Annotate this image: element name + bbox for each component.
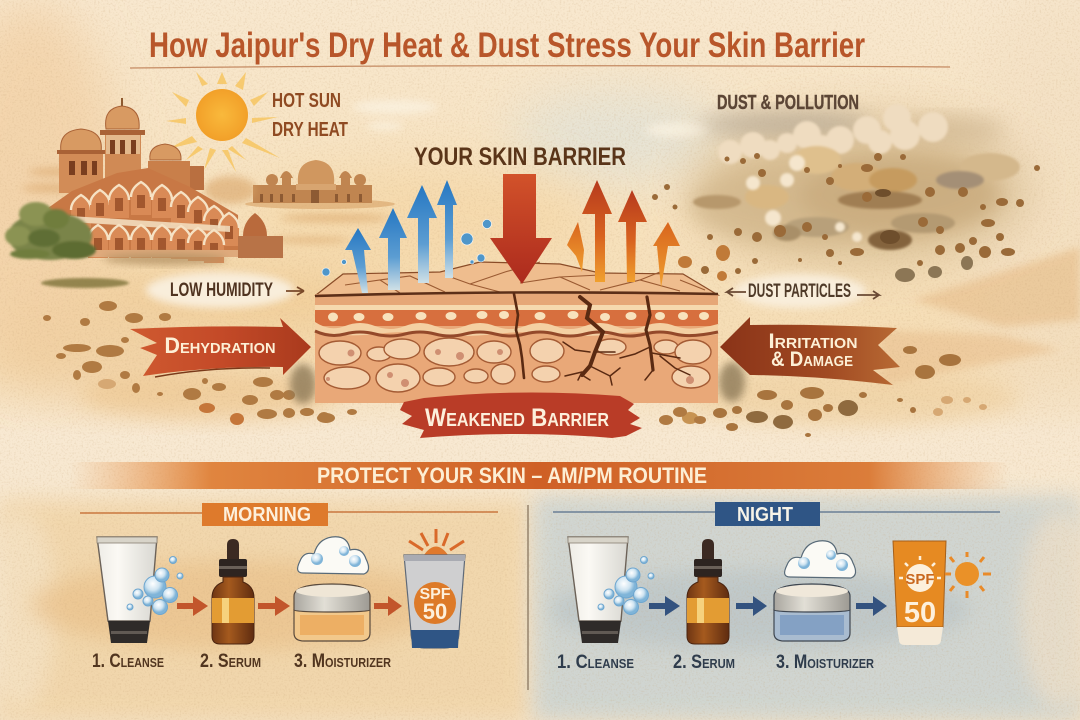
illustration: desert dune streaks <box>22 168 390 243</box>
icon: sun <box>945 552 991 598</box>
illustration: small shrubs on left ground <box>41 278 129 288</box>
product: SPF 50 sunscreen tube: 50 <box>904 597 936 629</box>
water droplets <box>322 220 492 276</box>
heading: your skin barrier: YOUR SKIN BARRIER <box>414 143 626 171</box>
panel divider <box>527 505 529 690</box>
arrow <box>374 596 402 616</box>
arrow callout: dehydration: Dehydration <box>164 333 276 358</box>
skin cross-section block <box>315 262 718 403</box>
arrow callout: dehydration <box>130 318 311 377</box>
step labels: 1. Cleanse <box>557 652 634 673</box>
product: moisturizer jar with cream <box>774 541 856 641</box>
illustration: dust particles scattered <box>652 153 1040 282</box>
wave layer <box>315 322 718 336</box>
illustration: pebbles near the block base <box>300 407 706 425</box>
night heading <box>553 502 1000 526</box>
product: SPF 50 sunscreen <box>404 529 465 648</box>
product: SPF 50 sunscreen tube: SPF <box>905 571 935 588</box>
cell nuclei <box>326 349 694 387</box>
night heading: NIGHT <box>737 504 793 526</box>
section banner: protect your skin <box>70 462 1010 489</box>
product: cleanser tube <box>568 537 654 643</box>
skin cells <box>319 338 711 392</box>
cloud light spots <box>746 155 862 242</box>
block top surface <box>316 262 718 295</box>
night routine <box>557 537 991 673</box>
block top edge <box>315 292 718 296</box>
step labels: 3. Moisturizer <box>776 652 875 673</box>
arrow callout: irritation and damage: & Damage <box>771 348 853 371</box>
arrow <box>856 596 887 616</box>
step labels <box>557 652 875 673</box>
illustration: Hawa Mahal palace <box>48 98 283 263</box>
title: How Jaipur's Dry Heat & Dust Stress Your Skin Barrier <box>149 26 865 65</box>
title underline <box>130 66 950 68</box>
product: SPF 50 sunscreen: 50 <box>423 599 447 624</box>
arrow <box>177 596 208 616</box>
block front <box>315 294 718 403</box>
illustration: sun <box>166 72 280 172</box>
product: cleanser tube <box>97 537 183 643</box>
morning heading <box>80 503 498 526</box>
illustration: soft clouds <box>353 100 710 137</box>
arrows: orange and red heat rising <box>567 180 680 288</box>
arrow <box>736 596 767 616</box>
step labels: 2. Serum <box>673 652 735 673</box>
cloud tan patches <box>693 146 1020 250</box>
banner: weakened barrier: Weakened Barrier <box>425 404 609 432</box>
illustration: ground pebbles left <box>43 301 330 425</box>
step labels <box>92 651 392 672</box>
step labels: 3. Moisturizer <box>294 651 392 672</box>
illustration: sand mound <box>103 253 227 265</box>
product: serum bottle <box>687 539 729 644</box>
product: serum bottle <box>212 539 254 644</box>
arrow callout: irritation and damage: Irritation <box>768 330 858 353</box>
cloud puffs <box>718 104 948 164</box>
morning routine <box>92 529 465 672</box>
label: low humidity: LOW HUMIDITY <box>170 280 273 301</box>
illustration: ground pebbles right <box>682 346 987 437</box>
arrow callout: irritation and damage <box>720 317 900 385</box>
illustration: distant palace <box>245 160 395 209</box>
step labels: 2. Serum <box>200 651 261 672</box>
label: dust & pollution: DUST & POLLUTION <box>717 92 859 114</box>
arrows: blue moisture loss <box>345 180 457 293</box>
arrow <box>258 596 290 616</box>
section banner: protect your skin: PROTECT YOUR SKIN – AM/PM ROUTINE <box>317 463 707 488</box>
banner: weakened barrier <box>400 392 642 438</box>
surface crack lines <box>345 262 705 293</box>
arrow <box>649 596 680 616</box>
label: hot sun, dry heat <box>272 90 348 141</box>
illustration: green bush <box>5 202 96 260</box>
arrow: central red downward <box>490 174 552 284</box>
cracks <box>514 294 690 385</box>
label: hot sun, dry heat: HOT SUN <box>272 90 341 112</box>
label: dust particles <box>727 274 879 308</box>
label: dust particles: DUST PARTICLES <box>748 281 851 302</box>
label: low humidity <box>146 272 304 308</box>
haze beside block <box>290 362 745 404</box>
product: SPF 50 sunscreen tube <box>893 541 946 645</box>
product: moisturizer jar with cream <box>294 537 370 641</box>
product: SPF 50 sunscreen: SPF <box>419 586 451 603</box>
illustration: dust cloud <box>690 104 1025 260</box>
step labels: 1. Cleanse <box>92 651 164 672</box>
label: hot sun, dry heat: DRY HEAT <box>272 119 348 141</box>
dots row <box>328 311 709 322</box>
morning heading: MORNING <box>223 504 311 526</box>
